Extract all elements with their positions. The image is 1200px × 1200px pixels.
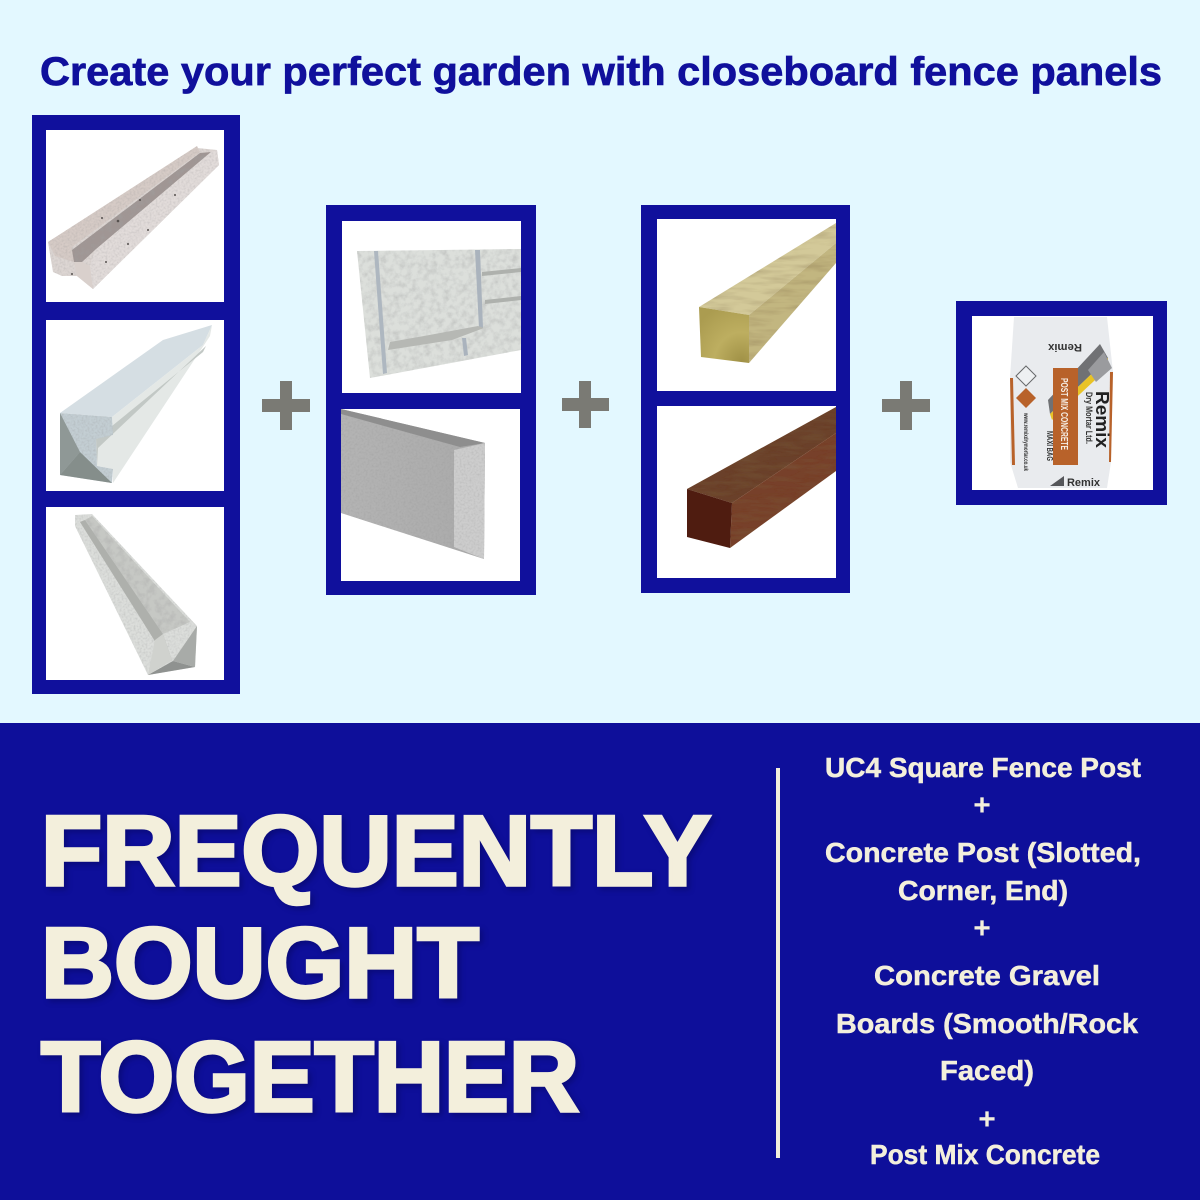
panel: gravel boards bbox=[326, 205, 536, 595]
image: concrete bag bbox=[972, 316, 1153, 490]
panel: post mix concrete bbox=[956, 301, 1167, 505]
panel: timber posts bbox=[641, 205, 850, 593]
text block: product list: Post Mix Concrete bbox=[870, 1139, 1100, 1170]
image: smooth gravel board bbox=[341, 409, 520, 581]
image: concrete bag: MAXI BAG bbox=[1045, 431, 1054, 461]
title: Create your perfect garden with closeboard fence panels bbox=[40, 50, 1162, 94]
image: concrete bag: www.remixdrymortar.co.uk bbox=[1022, 412, 1028, 471]
heading: frequently bought together: TOGETHER bbox=[41, 1021, 579, 1132]
text block: product list: + bbox=[973, 789, 991, 822]
image: rock faced board bbox=[342, 221, 521, 393]
text block: product list: Concrete Gravel bbox=[874, 960, 1100, 991]
text block: product list: + bbox=[978, 1103, 996, 1136]
panel: concrete posts bbox=[32, 115, 240, 694]
text block: product list bbox=[825, 752, 1141, 1170]
image: concrete bag: POST MIX CONCRETE bbox=[1058, 378, 1069, 450]
text block: product list: + bbox=[973, 912, 991, 945]
image: brown treated post bbox=[657, 406, 836, 578]
heading: frequently bought together bbox=[41, 795, 711, 1132]
text block: product list: Corner, End) bbox=[898, 875, 1068, 906]
image: end post bbox=[46, 507, 224, 680]
icon: plus 3 bbox=[882, 381, 930, 430]
image: concrete bag: Remix bbox=[1067, 477, 1101, 489]
image: concrete bag: Remix bbox=[1092, 391, 1112, 448]
heading: frequently bought together: FREQUENTLY bbox=[41, 795, 711, 906]
image: concrete bag: Dry Mortar Ltd. bbox=[1084, 392, 1094, 444]
text block: product list: Concrete Post (Slotted, bbox=[825, 837, 1141, 868]
image: corner post bbox=[46, 320, 224, 491]
image: concrete bag: Remix bbox=[1047, 341, 1082, 353]
image: slotted post bbox=[46, 130, 224, 302]
text block: product list: Boards (Smooth/Rock bbox=[836, 1008, 1139, 1039]
icon: plus 1 bbox=[262, 381, 310, 430]
icon: plus 2 bbox=[562, 381, 609, 428]
panel: frequently bought together bbox=[0, 723, 1200, 1200]
text block: product list: UC4 Square Fence Post bbox=[825, 752, 1141, 783]
image: green treated post bbox=[657, 219, 836, 391]
heading: frequently bought together: BOUGHT bbox=[41, 907, 479, 1018]
text block: product list: Faced) bbox=[940, 1055, 1034, 1086]
